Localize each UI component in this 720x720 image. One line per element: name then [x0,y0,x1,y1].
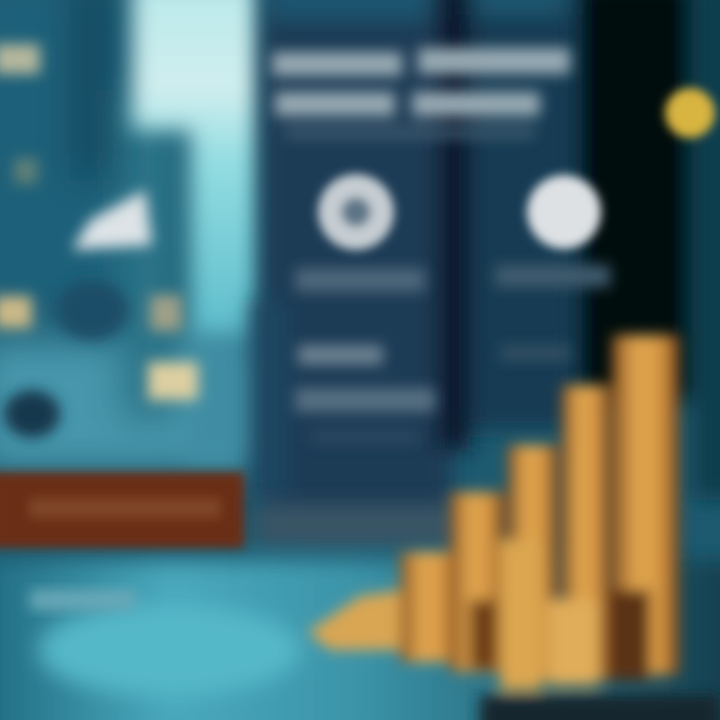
floor caption [30,590,135,610]
text block: right column [495,265,610,361]
icon: left circle [318,174,394,250]
bar chart: gold staircase [308,335,720,720]
title [272,48,570,138]
panel: dark tower columns [250,0,720,520]
text block: left column [295,268,435,444]
icon: right circle [527,175,601,249]
small icons: left side [0,44,198,438]
panel: reflective floor [0,505,720,720]
panel: brown banner [0,472,244,548]
icon: gold coin [665,88,715,138]
